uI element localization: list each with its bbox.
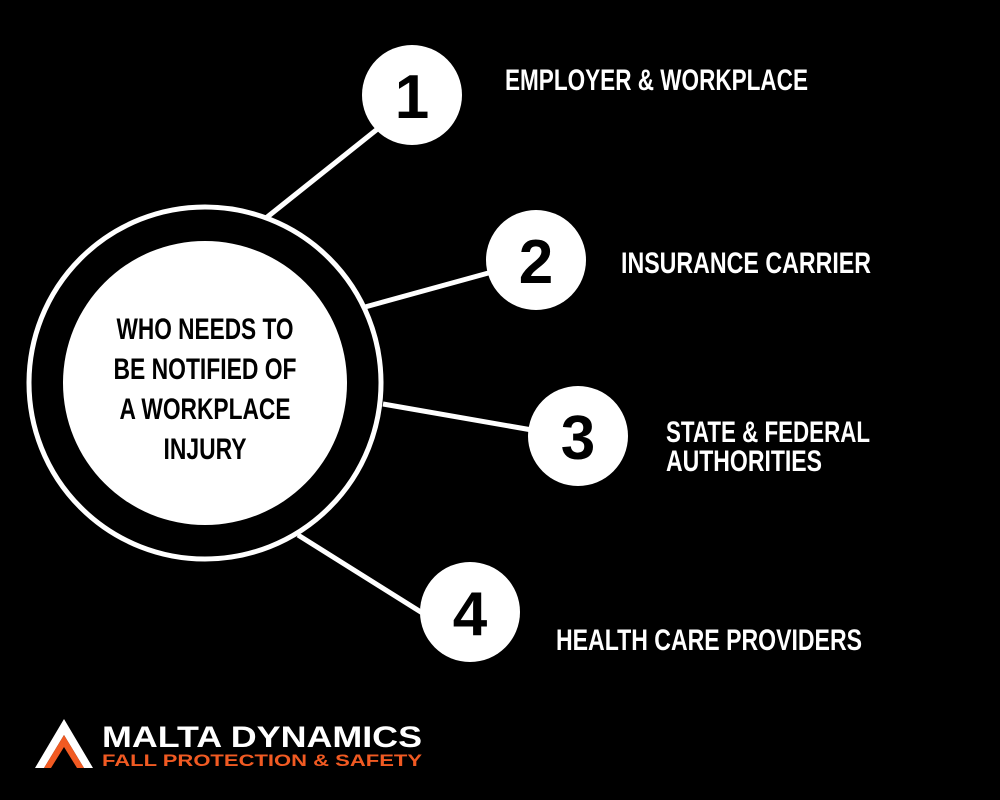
logo — [35, 719, 423, 770]
central circle — [29, 207, 381, 559]
item 1 — [362, 45, 808, 145]
item 3 — [528, 386, 870, 486]
item 3: STATE & FEDERAL — [666, 416, 870, 449]
logo: FALL PROTECTION & SAFETY — [102, 751, 423, 770]
central title text: INJURY — [164, 433, 246, 466]
item 1: 1 — [395, 63, 429, 132]
item 4 — [420, 562, 862, 662]
central title text: BE NOTIFIED OF — [114, 353, 296, 386]
central title text: WHO NEEDS TO — [116, 313, 294, 346]
item 3: 3 — [561, 404, 595, 473]
item 2 — [486, 210, 871, 310]
connector lines — [266, 123, 532, 614]
central title text: A WORKPLACE — [120, 393, 290, 426]
item 3: AUTHORITIES — [666, 445, 822, 478]
item 4: 4 — [453, 580, 488, 649]
item 1: EMPLOYER & WORKPLACE — [505, 64, 808, 97]
central title text — [114, 313, 296, 466]
item 2: 2 — [519, 228, 553, 297]
item 2: INSURANCE CARRIER — [621, 247, 871, 280]
logo: MALTA DYNAMICS — [102, 721, 422, 754]
icon: logo peak — [35, 719, 93, 768]
item 4: HEALTH CARE PROVIDERS — [556, 624, 862, 657]
